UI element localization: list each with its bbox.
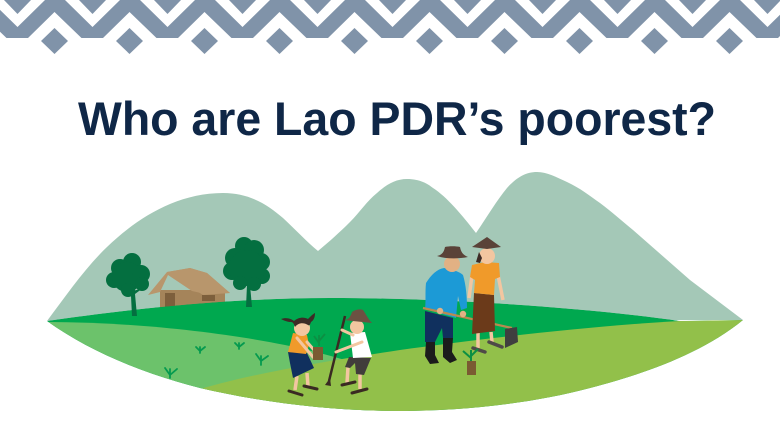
decorative zigzag pattern band	[0, 0, 780, 54]
man with hoe	[423, 246, 518, 364]
woman standing	[469, 237, 503, 352]
tree left	[106, 253, 150, 316]
illustration: farming landscape	[40, 172, 743, 420]
girl planting	[281, 313, 317, 395]
light green field	[48, 322, 408, 411]
potted plant held by girl	[313, 334, 325, 360]
potted seedling	[463, 349, 478, 375]
mountains	[47, 172, 743, 321]
boy with digging stick	[325, 309, 372, 393]
hut	[148, 268, 230, 312]
tree right	[223, 237, 270, 307]
dark green hill	[47, 298, 743, 420]
seedlings in field	[165, 343, 268, 378]
olive green field	[202, 320, 743, 411]
title: Who are Lao PDR’s poorest?	[78, 92, 716, 145]
